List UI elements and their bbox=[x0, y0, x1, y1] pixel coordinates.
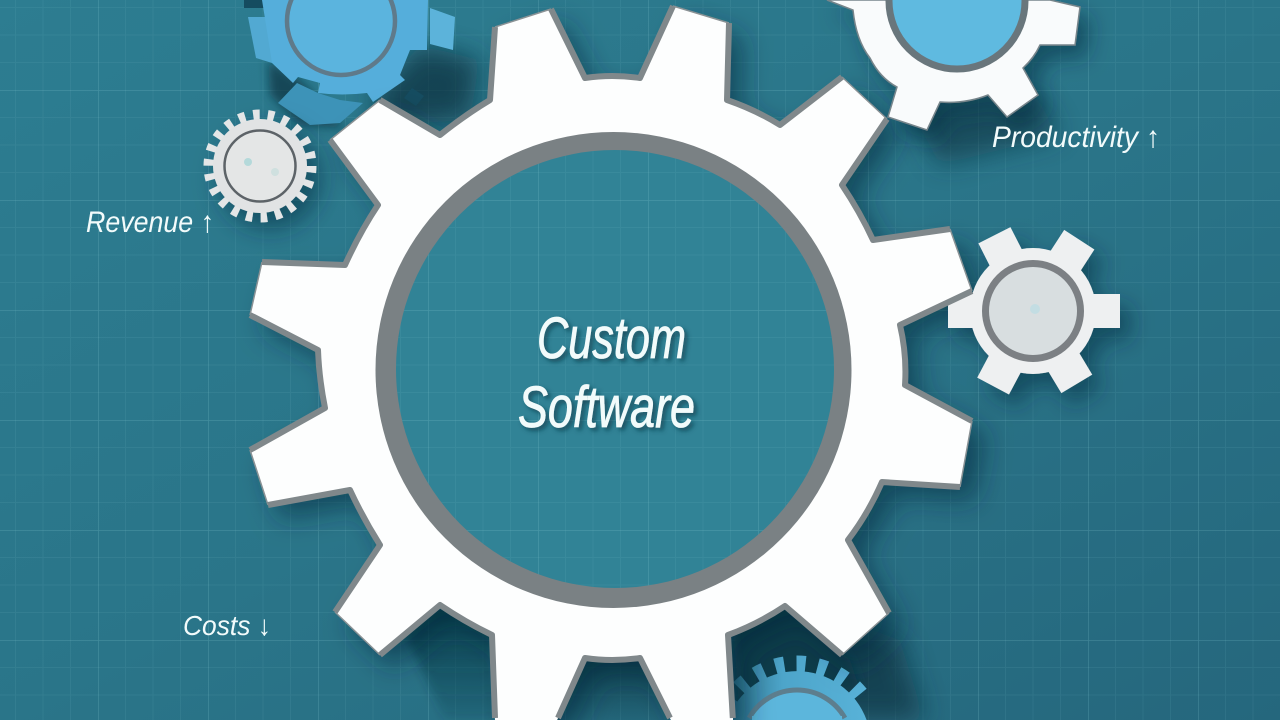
label: revenue: Revenue ↑ bbox=[86, 206, 214, 239]
shadow under top right gear bbox=[905, 95, 1060, 165]
icon: blue gear bottom bbox=[725, 600, 925, 720]
gear body bbox=[727, 671, 867, 720]
centre title bbox=[518, 306, 695, 440]
icon: white gear top right bbox=[827, 0, 1080, 165]
main gear shadow layer bbox=[250, 6, 972, 720]
gear hole bbox=[889, 0, 1025, 69]
gear teeth bbox=[727, 664, 866, 705]
gear valley bevels bbox=[250, 6, 972, 718]
label: costs: Costs ↓ bbox=[183, 610, 271, 641]
gear ring bbox=[749, 690, 845, 718]
gear ring and hole bbox=[287, 0, 395, 75]
front blue gear body bbox=[262, 0, 428, 102]
dark valley shadow bbox=[725, 600, 925, 720]
valley shading near bottom of main gear bbox=[405, 600, 680, 720]
gear tooth tip edges bbox=[250, 6, 972, 655]
centre title: Software bbox=[518, 375, 695, 440]
gear ring bbox=[986, 264, 1080, 358]
icon: white gear right bbox=[948, 227, 1120, 395]
gear bevel ring bbox=[376, 132, 852, 608]
gear centre opening bbox=[396, 150, 834, 588]
rear dark blue gear bbox=[248, 8, 455, 125]
gear ring bbox=[224, 130, 296, 202]
cast shadow behind blue gears bbox=[244, 0, 480, 128]
icon: small white gear bbox=[209, 115, 311, 217]
main white gear bbox=[250, 6, 972, 720]
icon: blue gear top left bbox=[244, 0, 480, 128]
label: productivity: Productivity ↑ bbox=[992, 121, 1160, 154]
gear body bbox=[250, 6, 972, 720]
gear body bbox=[827, 0, 1080, 130]
centre title: Custom bbox=[537, 306, 686, 371]
